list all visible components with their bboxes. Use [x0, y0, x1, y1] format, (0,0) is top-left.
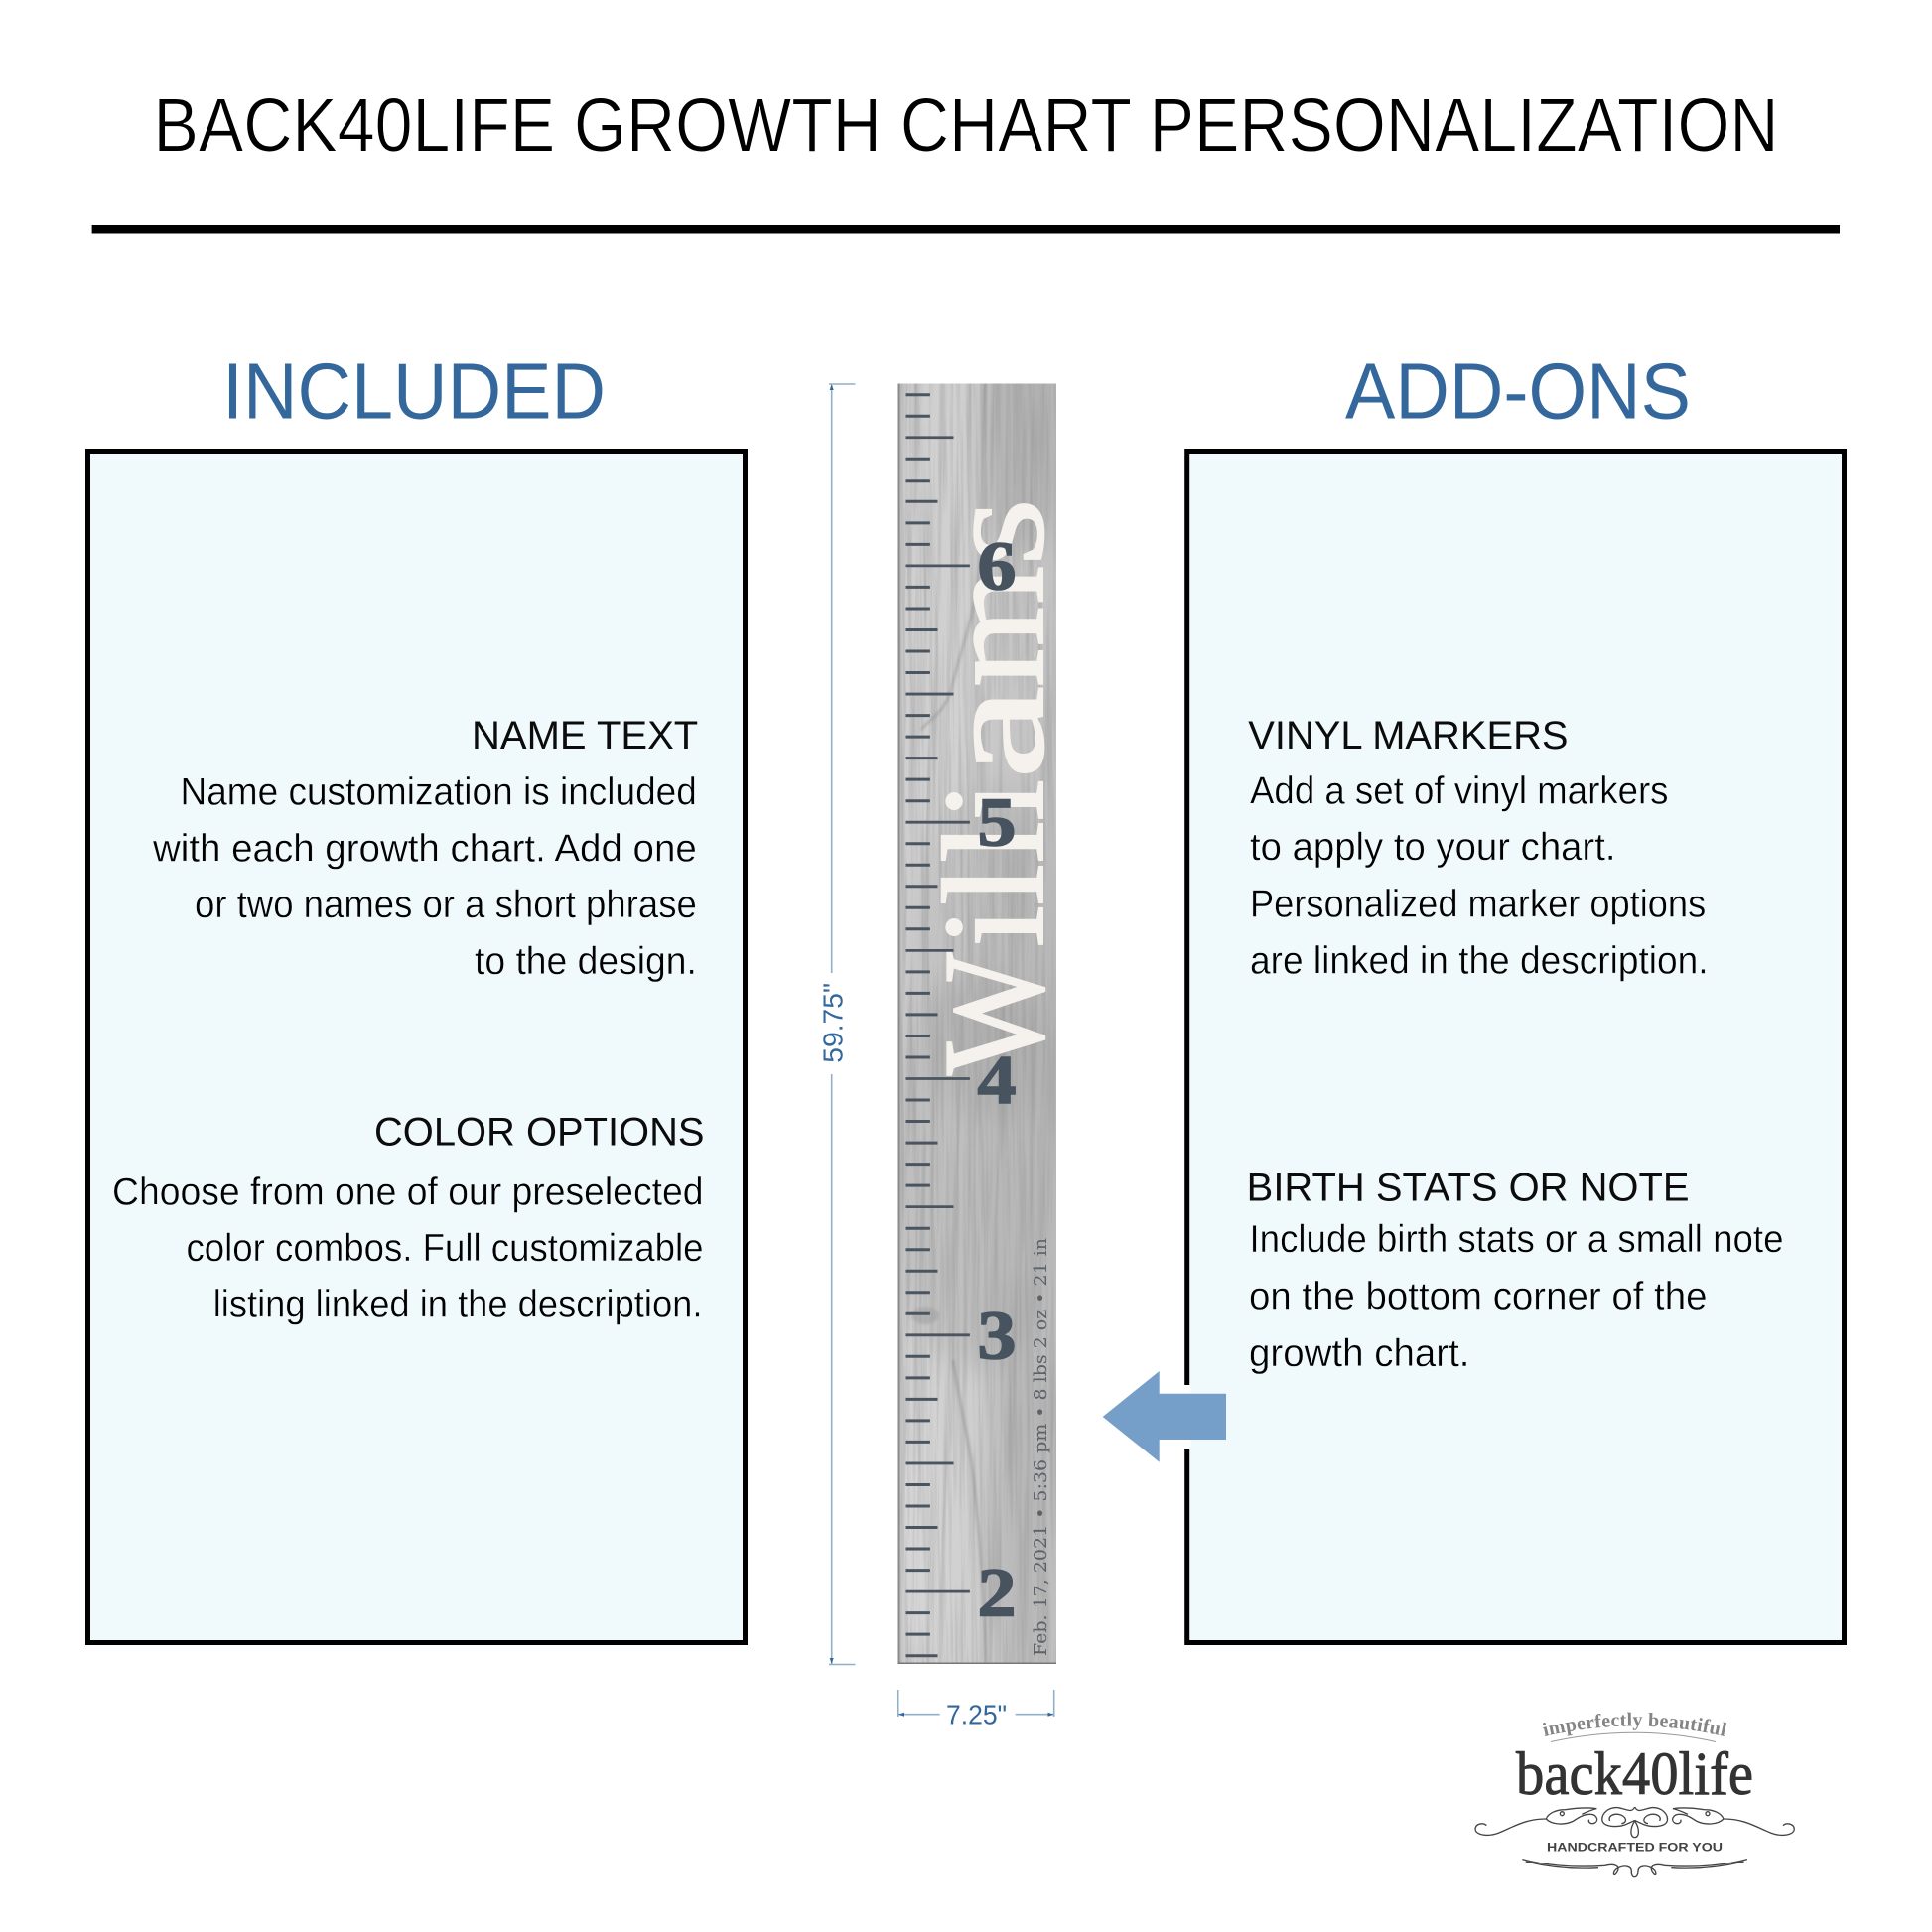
- heading: add-ons: ADD-ONS: [1345, 347, 1691, 435]
- text block: vinyl markers: Add a set of vinyl markers: [1250, 769, 1668, 812]
- foot numbers: 6: [977, 528, 1017, 606]
- text block: vinyl markers: [1248, 714, 1708, 982]
- name: Williams: l: [913, 821, 1074, 863]
- text block: name text: NAME TEXT: [472, 714, 698, 758]
- name: Williams: m: [913, 566, 1074, 687]
- panel: included: [87, 451, 745, 1642]
- panel: add-ons: [1187, 451, 1845, 1642]
- logo arc and dots: [1551, 1732, 1716, 1741]
- foot numbers: 4: [977, 1042, 1017, 1119]
- dimension: width 7.25 in: 7.25": [946, 1700, 1007, 1730]
- logo strapline: HANDCRAFTED FOR YOU: [1547, 1840, 1723, 1854]
- text block: name text: [152, 714, 698, 983]
- name: Williams: s: [913, 498, 1074, 566]
- dimension: height 59.75 in: 59.75": [818, 983, 848, 1063]
- logo: back40life: [1474, 1712, 1795, 1878]
- foot numbers: [977, 528, 1017, 1632]
- logo flourish: [1475, 1807, 1794, 1877]
- text block: name text: with each growth chart. Add one: [152, 828, 697, 870]
- dimension: height 59.75 in: [818, 384, 856, 1664]
- text block: vinyl markers: VINYL MARKERS: [1248, 714, 1569, 758]
- heading: included: INCLUDED: [222, 347, 606, 435]
- text block: vinyl markers: to apply to your chart.: [1250, 826, 1616, 869]
- logo tagline: imperfectly beautiful: [1543, 1712, 1726, 1736]
- text block: color options: COLOR OPTIONS: [374, 1110, 705, 1154]
- text block: name text: Name customization is included: [181, 770, 697, 814]
- text block: color options: color combos. Full customizable: [187, 1227, 703, 1270]
- growth chart board: [897, 383, 1056, 1664]
- text block: vinyl markers: are linked in the description.: [1250, 939, 1708, 982]
- logo wordmark: back40life: [1516, 1741, 1753, 1808]
- text block: color options: [112, 1110, 705, 1326]
- foot numbers: 2: [977, 1555, 1017, 1632]
- birth stats text: Feb. 17, 2021 • 5:36 pm • 8 lbs 2 oz • 21 in: [1031, 1238, 1051, 1656]
- arrow pointing to birth stats: [1103, 1371, 1226, 1462]
- text block: birth stats or note: on the bottom corner of the: [1249, 1276, 1708, 1318]
- text block: vinyl markers: Personalized marker options: [1250, 883, 1706, 925]
- name: Williams: i: [913, 779, 1074, 821]
- name: Williams: a: [913, 686, 1074, 779]
- foot numbers: 5: [977, 785, 1017, 862]
- text block: birth stats or note: growth chart.: [1249, 1332, 1469, 1375]
- foot numbers: 3: [977, 1298, 1017, 1374]
- name: Williams: l: [913, 864, 1074, 905]
- title rule: [92, 225, 1840, 234]
- name: Williams: W: [913, 952, 1074, 1075]
- name: Williams: i: [913, 905, 1074, 947]
- text block: birth stats or note: Include birth stats or a small note: [1249, 1218, 1783, 1261]
- text block: color options: Choose from one of our preselected: [112, 1171, 703, 1213]
- text block: name text: to the design.: [475, 940, 697, 983]
- text block: birth stats or note: [1247, 1166, 1783, 1375]
- text block: name text: or two names or a short phrase: [195, 884, 697, 926]
- ruler tick marks: [905, 395, 970, 1656]
- dimension: width 7.25 in: [898, 1690, 1054, 1730]
- text block: color options: listing linked in the description.: [213, 1284, 702, 1326]
- text block: birth stats or note: BIRTH STATS OR NOTE: [1247, 1166, 1689, 1209]
- wood texture: [897, 383, 1056, 1664]
